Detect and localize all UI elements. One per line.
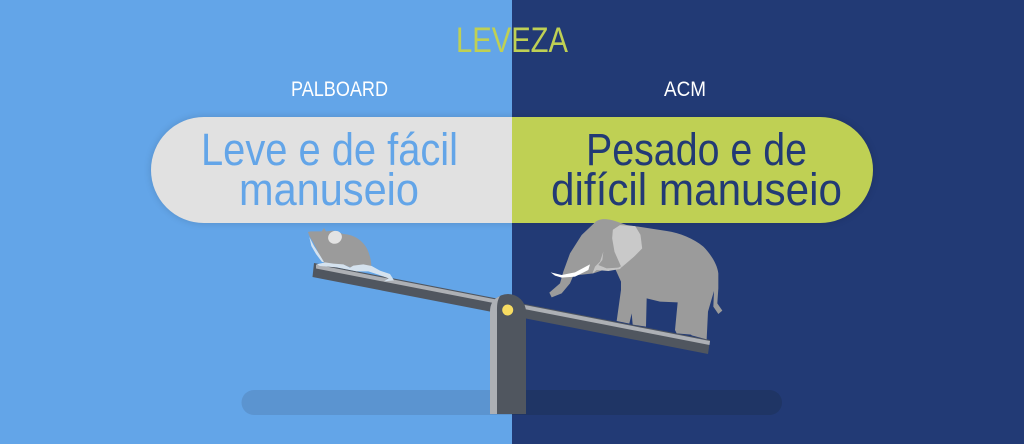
text: difícil manuseio: difícil manuseio <box>551 164 842 215</box>
panel: left pill half <box>151 117 512 223</box>
text: manuseio left: manuseio <box>239 164 419 215</box>
heading: PALBOARD: PALBOARD <box>291 78 388 101</box>
pill shadow <box>151 117 873 223</box>
panel: right pill half <box>512 117 873 223</box>
panel: right background <box>512 0 1024 444</box>
ground shadow <box>242 390 782 415</box>
text: Pesado e de: Pesado e de <box>586 124 807 175</box>
icon: mouse <box>308 228 394 281</box>
seesaw beam <box>312 263 710 354</box>
seesaw pivot column <box>490 294 526 414</box>
panel: left background <box>0 0 512 444</box>
pivot pin <box>502 304 513 316</box>
title: LEVEZA <box>456 21 569 60</box>
text: Leve e de fácil: Leve e de fácil <box>201 124 458 175</box>
icon: elephant <box>549 219 722 339</box>
heading: ACM: ACM <box>664 78 706 101</box>
